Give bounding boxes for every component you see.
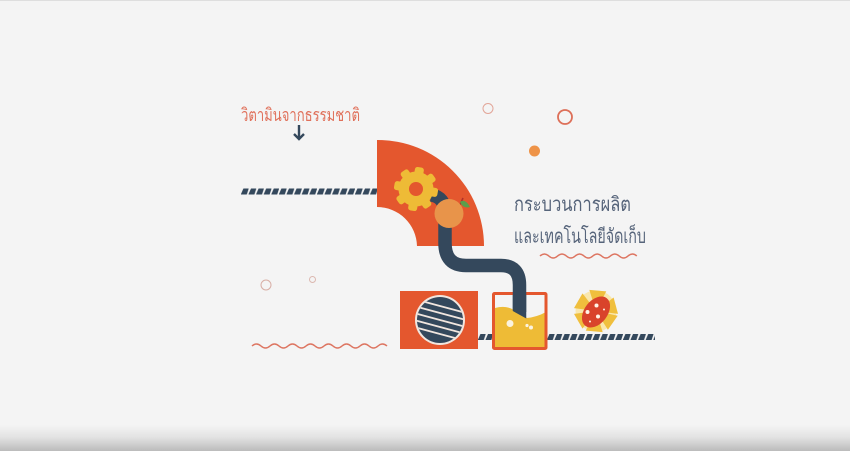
icon: down arrow <box>294 125 304 139</box>
bottom shadow <box>0 425 850 451</box>
fan unit <box>400 291 478 349</box>
machine: quarter ring <box>377 140 484 246</box>
heading: production process and storage technology: กระบวนการผลิต <box>514 194 631 216</box>
icon: orange <box>434 198 470 228</box>
decorative circles <box>261 104 572 290</box>
heading: natural vitamins: วิตามินจากธรรมชาติ <box>241 105 360 125</box>
heading: production process and storage technology: และเทคโนโลยีจัดเก็บ <box>514 223 646 248</box>
wavy line: left <box>252 344 387 348</box>
pipe <box>431 195 520 312</box>
wavy line: right <box>540 254 637 258</box>
lower conveyor <box>478 334 655 340</box>
upper conveyor <box>241 188 378 194</box>
icon: sliced fruit <box>574 290 618 333</box>
juice container <box>494 292 546 349</box>
icon: gear <box>394 167 438 211</box>
heading: production process and storage technology <box>514 194 646 248</box>
